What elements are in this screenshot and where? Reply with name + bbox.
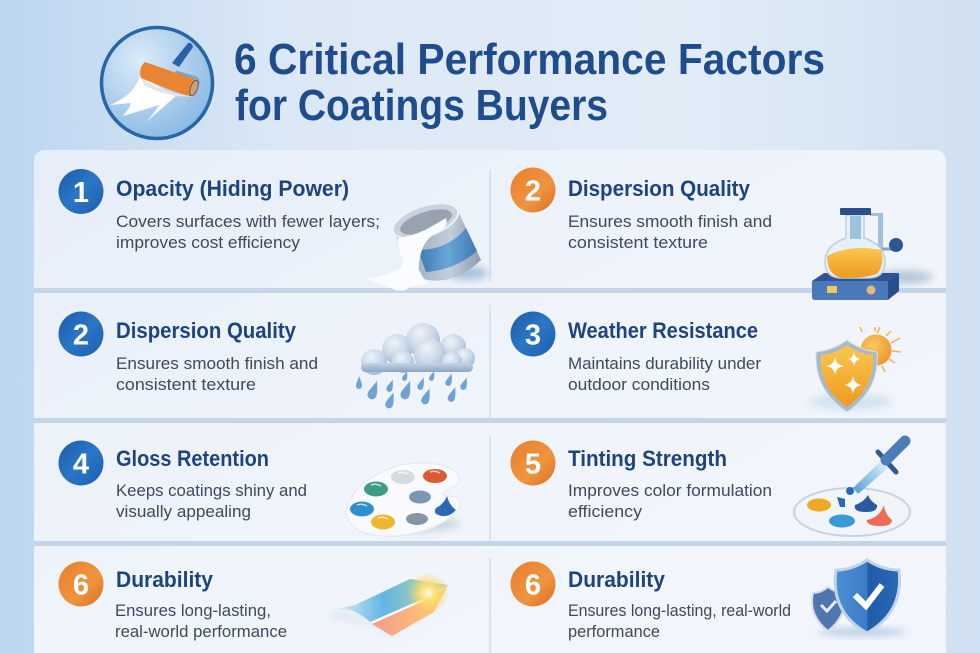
icon: dropper and palette xyxy=(794,441,910,536)
factor 2 left: Ensures smooth finish and xyxy=(116,354,318,373)
icon: gloss swatch xyxy=(330,572,449,636)
icon: rain cloud xyxy=(356,323,475,409)
factor 6 right xyxy=(510,562,791,641)
factor 4: visually appealing xyxy=(116,502,251,521)
factor 3: outdoor conditions xyxy=(568,375,710,394)
factor 4 xyxy=(58,440,307,521)
title xyxy=(234,35,825,130)
factor 2 left: 2 xyxy=(73,320,89,352)
factor 1: 1 xyxy=(73,177,89,209)
factor 1: improves cost efficiency xyxy=(116,233,300,252)
factor 4: Gloss Retention xyxy=(116,446,269,471)
factor 6 right: Durability xyxy=(568,567,666,592)
factor 4: 4 xyxy=(73,448,89,480)
factor 2 right: Ensures smooth finish and xyxy=(568,212,772,231)
factor 6 left xyxy=(58,562,287,641)
title: for Coatings Buyers xyxy=(235,81,608,130)
factor 6 right: 6 xyxy=(525,570,541,602)
factor 6 right: performance xyxy=(568,622,660,641)
factor 3: Weather Resistance xyxy=(568,318,758,343)
factor 3: Maintains durability under xyxy=(568,354,761,373)
factor 6 left: real-world performance xyxy=(115,622,287,641)
factor 6 right: Ensures long-lasting, real-world xyxy=(568,601,791,620)
factor 6 left: Ensures long-lasting, xyxy=(115,601,271,620)
icon: flask on stirrer xyxy=(812,208,933,300)
icon: paint bucket xyxy=(366,196,488,291)
factor 2 right: consistent texture xyxy=(568,233,708,252)
factor 5: Tinting Strength xyxy=(568,446,727,471)
factor 3: 3 xyxy=(525,320,541,352)
factor 5: Improves color formulation xyxy=(568,481,772,500)
factor 5: 5 xyxy=(525,448,541,480)
title: 6 Critical Performance Factors xyxy=(234,35,825,84)
icon: check shields xyxy=(812,560,907,636)
factor 5 xyxy=(510,440,772,521)
factor 1: Opacity (Hiding Power) xyxy=(116,176,349,201)
icon: paint roller badge xyxy=(102,28,212,138)
icon: paint palette xyxy=(346,463,461,536)
factor 3 xyxy=(510,312,761,394)
factor 6 left: Durability xyxy=(116,567,214,592)
factor 2 right: Dispersion Quality xyxy=(568,176,751,201)
icon: shield and sun xyxy=(808,327,901,412)
factor 2 left xyxy=(58,312,318,394)
factor 1: Covers surfaces with fewer layers; xyxy=(116,212,380,231)
panel: factors xyxy=(34,150,946,653)
factor 4: Keeps coatings shiny and xyxy=(116,481,307,500)
factor 6 left: 6 xyxy=(73,570,89,602)
factor 5: efficiency xyxy=(568,502,643,521)
factor 2 left: Dispersion Quality xyxy=(116,318,297,343)
factor 1 xyxy=(58,169,380,252)
factor 2 left: consistent texture xyxy=(116,375,256,394)
factor 2 right xyxy=(510,168,772,252)
factor 2 right: 2 xyxy=(525,176,541,208)
